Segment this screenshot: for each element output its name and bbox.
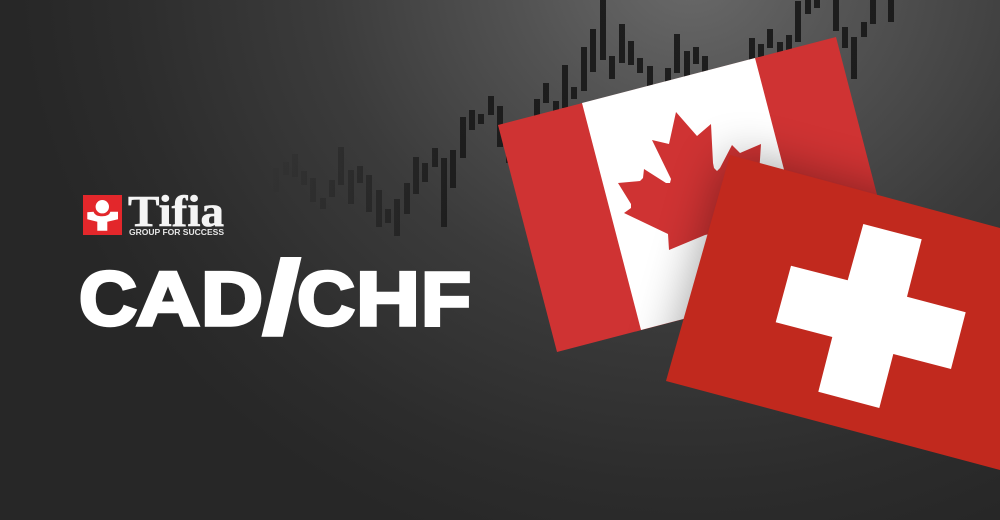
logo figure icon [87,200,118,231]
Canada white band [582,58,814,330]
title: D [201,257,263,342]
title: F [421,257,471,342]
logo: Tifia [83,187,225,237]
logo red square [83,195,122,235]
cast shadow on Canada flag [650,133,877,328]
title: C [297,257,355,342]
logo tagline: GROUP FOR SUCCESS [129,228,225,237]
title: A [136,257,200,342]
Swiss white cross [776,224,966,408]
icon: maple leaf [618,112,775,250]
Swiss red field [666,155,1000,470]
candlestick chart [273,0,894,236]
logo wordmark: Tifia [128,187,224,236]
title: H [356,257,420,342]
Canada red field [498,37,895,352]
flag: Switzerland [666,155,1000,470]
title: C [79,257,137,342]
flag: Canada [498,37,877,352]
title: / [264,242,299,354]
